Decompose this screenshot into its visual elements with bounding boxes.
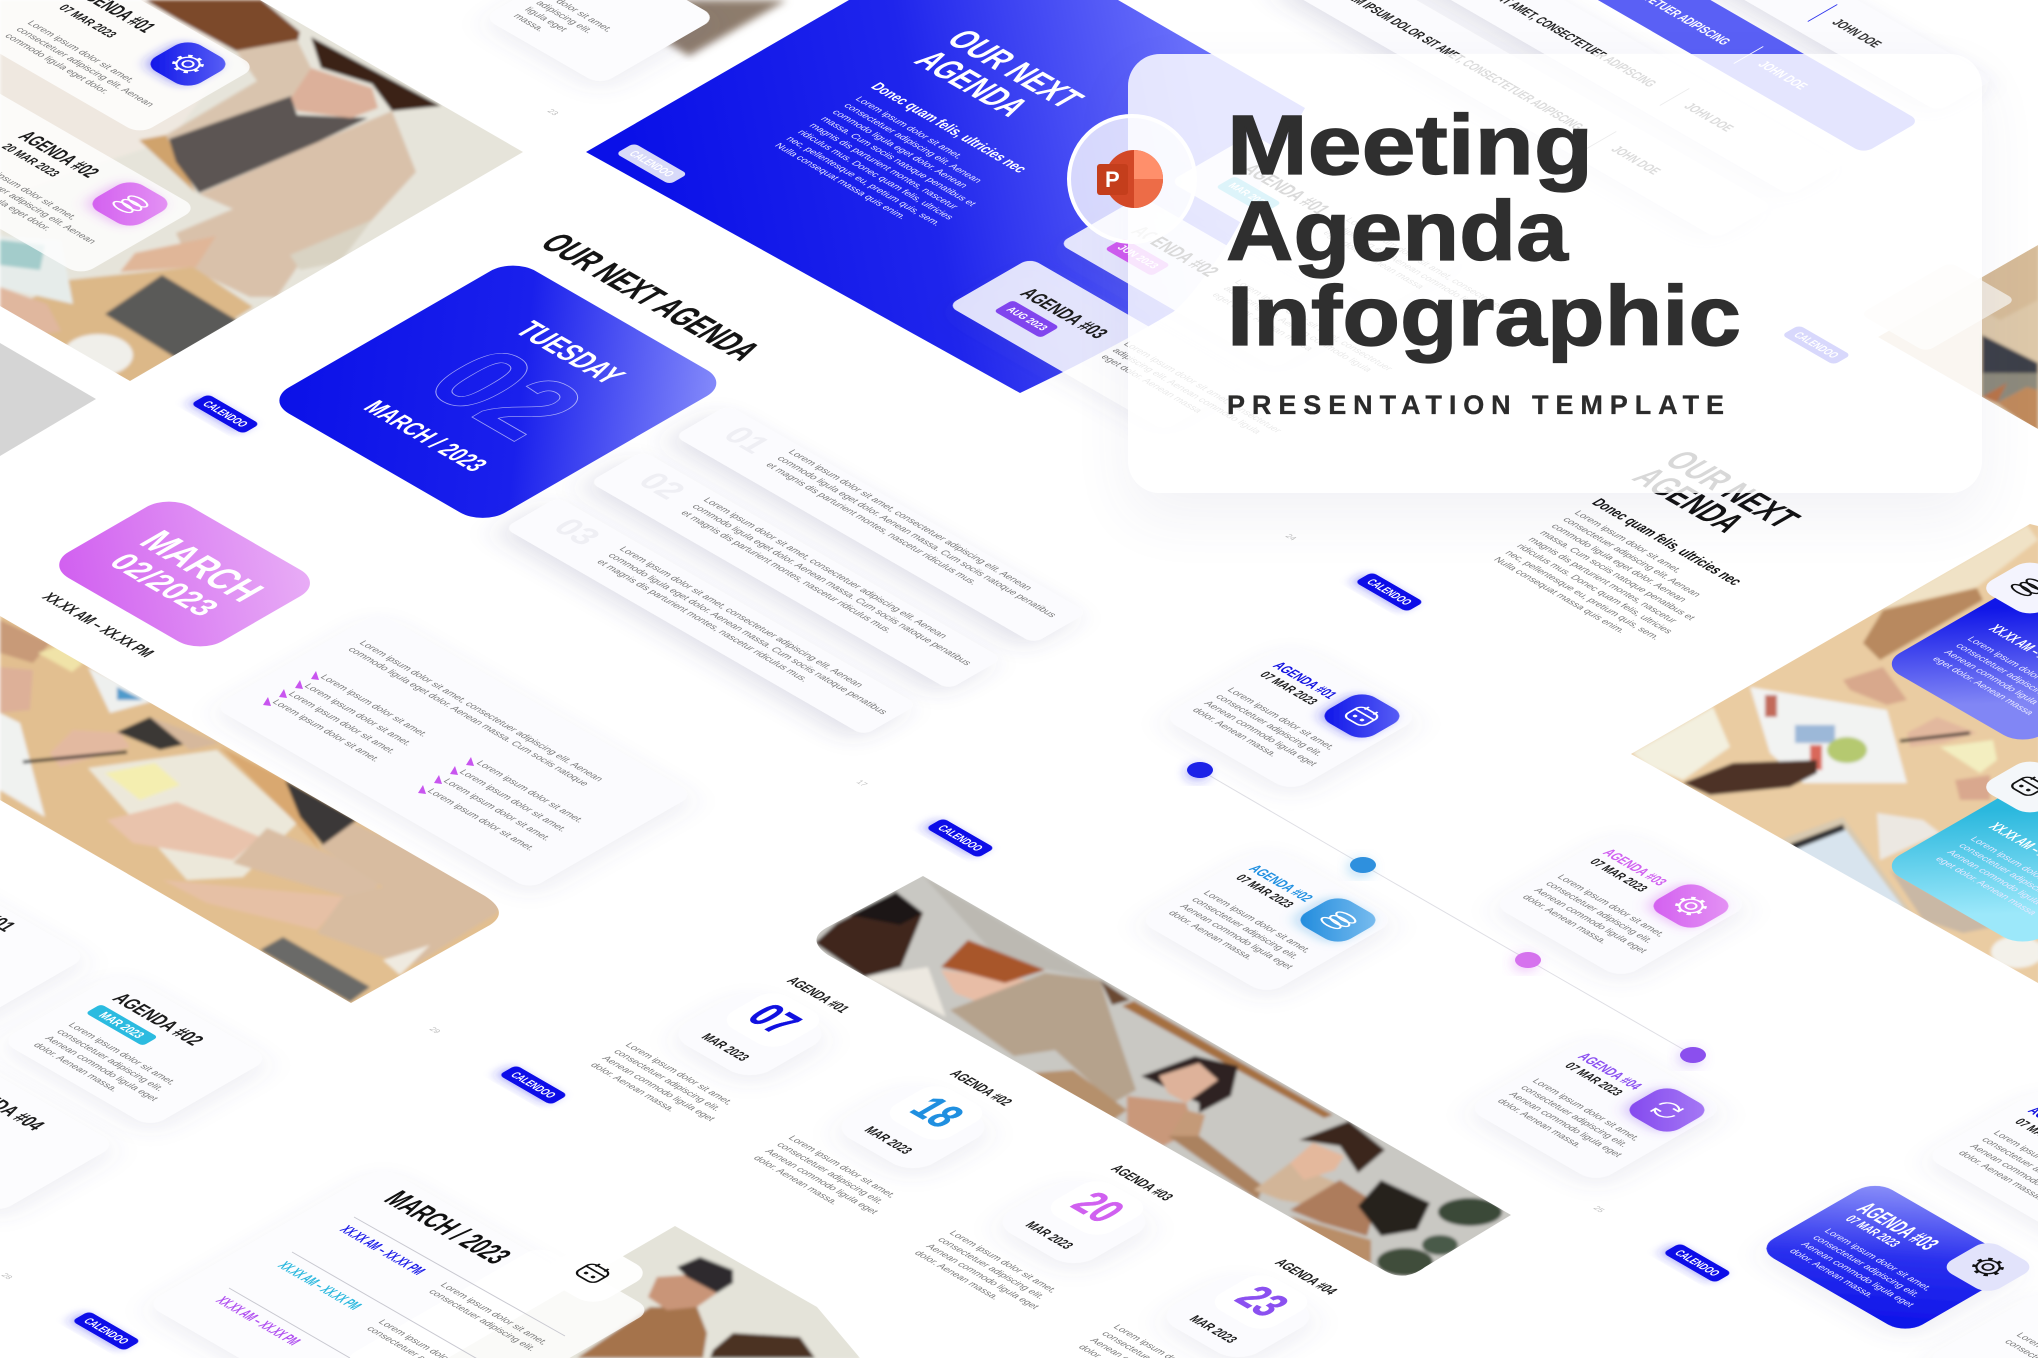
bullets left: Lorem ipsum dolor sit amet. <box>301 682 414 748</box>
agenda 01 text: commodo ligula eget dolor. <box>2 32 112 96</box>
outlined number 02: 02 <box>397 331 614 457</box>
badge: calendoo: CALENDOO <box>934 823 986 853</box>
agenda 01 text: consectetuer adipiscing elit. Aenean <box>13 26 156 109</box>
panel: march pink date <box>46 494 323 654</box>
card: agenda 02 on slide: eget dolor. Aenean massa <box>1209 291 1316 353</box>
schedule card content: Lorem ipsum dolor sit amet, <box>437 1281 550 1347</box>
card: teal time slot <box>1881 774 2038 948</box>
timeline dot purple <box>1680 1047 1706 1063</box>
icon: powerpoint badge <box>1069 116 1195 242</box>
icon: gear <box>143 38 233 90</box>
timeline card 3: consectetuer adipiscing elit. <box>1543 880 1655 945</box>
page number 25: 25 <box>1591 1205 1607 1214</box>
subtitle: PRESENTATION TEMPLATE <box>1227 390 1724 420</box>
date block 20: Lorem ipsum dolor sit amet, <box>946 1229 1059 1295</box>
card: agenda 04 partial <box>0 1058 117 1214</box>
badge: calendoo <box>1663 1243 1732 1283</box>
glass card: agenda 01 <box>0 0 257 134</box>
row 03: et magnis dis parturient montes, nascetur ridiculus mus. <box>594 558 811 684</box>
page number 29: 29 <box>427 1026 443 1035</box>
panel: blue agenda 03 card: Aenean commodo ligula eget <box>1798 1241 1916 1309</box>
timeline dot sky <box>1350 857 1376 873</box>
panel: tuesday date card <box>266 258 730 526</box>
agenda 02 text: AGENDA #02 <box>13 128 104 181</box>
faint badge under panel <box>1782 325 1851 365</box>
agenda list cards over blue slide <box>948 134 1528 465</box>
card: blue time slot <box>1881 572 2038 746</box>
card: agenda 03 on slide: AGENDA #03 <box>1015 285 1113 342</box>
card: top text fragment: adipiscing elit. <box>533 0 595 35</box>
slide body text: nec, pellentesque eu, pretium quis, sem. <box>783 135 943 228</box>
agenda 02 content: Aenean commodo ligula eget <box>42 1035 160 1103</box>
date block 23: AGENDA #04 <box>1271 1257 1341 1297</box>
bullets left: Lorem ipsum dolor sit amet. <box>269 698 382 764</box>
slide body text: Nulla consequat massa quis enim. <box>772 142 909 221</box>
card: agenda 01 on slide: Lorem ipsum dolor sit amet, consectetuer <box>1342 216 1507 311</box>
slide badge: CALENDOO <box>626 149 678 179</box>
date block 18: Lorem ipsum dolor sit amet, <box>785 1134 898 1200</box>
date block 23: MAR 2023 <box>1186 1313 1242 1345</box>
date block 20: dolor. Aenean massa. <box>911 1249 1002 1301</box>
card: agenda 02 on slide: Lorem ipsum dolor sit amet, consectetuer <box>1231 278 1396 373</box>
bullets right <box>418 757 586 853</box>
panel: blue agenda 03 card: 07 MAR 2023 <box>1842 1213 1905 1249</box>
badge: calendoo: CALENDOO <box>1671 1248 1723 1278</box>
timeline card 3: AGENDA #03 <box>1599 847 1671 888</box>
icon: coins white tile <box>1978 558 2038 618</box>
agenda 02 text <box>0 128 110 252</box>
bullets right: Lorem ipsum dolor sit amet. <box>456 768 569 834</box>
schedule card content: MARCH / 2023 <box>376 1186 519 1269</box>
lower right text block: our next agenda: consectetuer adipiscing elit. Aenean <box>1560 516 1703 599</box>
timeline card 1: dolor. Aenean massa. <box>1189 706 1280 758</box>
timeline card 4: AGENDA #04 <box>1574 1051 1646 1092</box>
badge: calendoo <box>499 1065 568 1105</box>
page number 23: 23 <box>545 108 561 117</box>
photo: woman at desk with glass cards <box>0 0 530 385</box>
date block 20: AGENDA #03 <box>1107 1163 1177 1203</box>
timeline card 1: Lorem ipsum dolor sit amet, <box>1224 686 1337 752</box>
date block 07: 07 <box>736 997 813 1041</box>
schedule card content: XX.XX AM – XX.XX PM <box>336 1224 428 1277</box>
lower right text block: our next agenda: AGENDA <box>1623 462 1754 538</box>
photo: slide fragment at top <box>600 0 787 56</box>
timeline card 3: 07 MAR 2023 <box>1587 856 1651 894</box>
badge: calendoo <box>72 1311 141 1351</box>
timeline card 1: consectetuer adipiscing elit. <box>1213 693 1325 758</box>
glass card on man photo <box>341 1245 653 1358</box>
date block 07: Aenean commodo ligula eget <box>599 1055 717 1123</box>
icon: calendar white tile <box>1978 757 2038 817</box>
card: agenda 01 on slide: eget dolor. Aenean massa <box>1320 229 1427 291</box>
card: agenda 02 on slide: AGENDA #02 <box>1126 223 1224 280</box>
schedule card content: consectetuer adipiscing elit. <box>426 1288 538 1353</box>
row 02: 02 <box>630 467 694 505</box>
page number 24: 24 <box>1283 533 1299 542</box>
photo: hands on table <box>0 610 520 1010</box>
card: agenda 03 on slide: eget dolor. Aenean massa <box>1098 353 1205 415</box>
lower right text block: our next agenda: magnis dis parturient montes, nascetur <box>1525 536 1680 625</box>
panel: march pink date: 02/2023 <box>101 548 227 622</box>
row: fourth <box>1284 0 1773 238</box>
badge: calendoo: CALENDOO <box>1363 577 1415 607</box>
date block 07: MAR 2023 <box>698 1031 754 1063</box>
card: agenda 01 on slide: adipiscing elit. Aenean commodo ligula <box>1331 223 1486 312</box>
lower right text block: our next agenda: massa. Cum sociis natoque penatibus et <box>1537 529 1698 622</box>
badge: calendoo: CALENDOO <box>199 399 251 429</box>
card: agenda 02 <box>0 972 270 1128</box>
agenda 02 content: Lorem ipsum dolor sit amet, <box>65 1021 178 1087</box>
date block 23 <box>1075 1257 1341 1358</box>
slide title <box>905 24 1092 122</box>
panel: big blue slide <box>586 0 1305 393</box>
date block 20 <box>911 1163 1177 1318</box>
agenda 02 text: 20 MAR 2023 <box>0 141 63 179</box>
date block 18: Aenean commodo ligula eget <box>762 1148 880 1216</box>
row 03: Lorem ipsum dolor sit amet, consectetuer adipiscing elit. Aenean <box>616 545 865 689</box>
row 02: Lorem ipsum dolor sit amet, consectetuer adipiscing elit. Aenean <box>700 496 949 640</box>
bullets left: Lorem ipsum dolor sit amet. <box>285 690 398 756</box>
page number 17: 17 <box>854 779 870 788</box>
panel: blue agenda 03 card: dolor. Aenean massa. <box>1786 1247 1877 1299</box>
timeline card 4: Aenean commodo ligula eget <box>1506 1091 1624 1159</box>
icon: coins <box>85 178 175 230</box>
badge: calendoo <box>191 394 260 434</box>
slide badge <box>616 143 688 184</box>
slide body text: massa. Cum sociis natoque penatibus et <box>818 115 979 208</box>
timeline card 2: dolor. Aenean massa. <box>1165 909 1256 961</box>
bullets right: Lorem ipsum dolor sit amet. <box>473 759 586 825</box>
panel: blue agenda 03 card: AGENDA #03 <box>1850 1199 1945 1254</box>
agenda 02 content: dolor. Aenean massa. <box>30 1041 121 1093</box>
bullets left: Lorem ipsum dolor sit amet. <box>317 673 430 739</box>
slide body text <box>772 95 1013 235</box>
row 03: 03 <box>545 513 609 551</box>
card: agenda 02 on slide: adipiscing elit. Aenean commodo ligula <box>1220 285 1375 374</box>
timeline card 1: 07 MAR 2023 <box>1257 669 1321 707</box>
row 02: et magnis dis parturient montes, nascetur ridiculus mus. <box>678 509 895 635</box>
slide body text: consectetuer adipiscing elit. Aenean <box>841 102 984 185</box>
date block 07: Lorem ipsum dolor sit amet, <box>622 1041 735 1107</box>
timeline card 1: Aenean commodo ligula eget <box>1201 700 1319 768</box>
bullets left <box>263 671 430 764</box>
title glass panel <box>1128 54 1982 493</box>
card: agenda 02 on slide <box>1059 196 1417 403</box>
lower right text block: our next agenda: ridiculus mus. Donec quam felis, ultricies <box>1514 542 1675 636</box>
numbered list <box>504 405 1087 736</box>
row: fourth: JOHN DOE <box>1608 143 1665 177</box>
row: third <box>1357 0 1846 196</box>
slide subtitle: Donec quam felis, ultricies nec <box>867 81 1030 175</box>
date block 07: AGENDA #01 <box>783 975 853 1015</box>
title text: Meeting <box>1227 98 1593 192</box>
panel: blue agenda 03 card: Lorem ipsum dolor sit amet, <box>1821 1227 1934 1293</box>
panel: march schedule card <box>146 1167 608 1358</box>
lower right text block: our next agenda: commodo ligula eget dolor. Aenean <box>1548 523 1689 604</box>
card: agenda 02 on slide: JUN 2023 <box>1114 243 1161 271</box>
title text: Agenda <box>1226 184 1569 278</box>
row 02 <box>589 451 1002 690</box>
date block 07 <box>587 975 853 1130</box>
date block 07: dolor. Aenean massa. <box>587 1061 678 1113</box>
card: top text fragment <box>483 0 717 85</box>
card: agenda 01 partial <box>0 870 88 1026</box>
glass card: agenda 02 <box>0 58 198 276</box>
badge: calendoo: CALENDOO <box>507 1070 559 1100</box>
tuesday label: TUESDAY <box>507 316 633 390</box>
row: third: JOHN DOE <box>1681 100 1738 134</box>
schedule card content: XX.XX AM – XX.XX PM <box>274 1260 365 1312</box>
lower right text block: our next agenda: OUR NEXT <box>1655 445 1808 534</box>
badge: calendoo <box>926 818 995 858</box>
title text: Infographic <box>1227 269 1741 363</box>
date block 20: consectetuer adipiscing elit. <box>935 1236 1047 1301</box>
icon: powerpoint badge: P <box>1105 167 1120 192</box>
card: top text fragment: massa. <box>510 12 547 33</box>
date block 18: AGENDA #02 <box>946 1068 1016 1108</box>
bullets right: Lorem ipsum dolor sit amet. <box>440 777 553 843</box>
glass card on right photo <box>1860 262 2016 352</box>
date block 18: dolor. Aenean massa. <box>750 1154 841 1206</box>
agenda 01 text: 07 MAR 2023 <box>56 2 120 40</box>
slide body text: magnis dis parturient montes, nascetur <box>806 122 961 211</box>
table rows top right <box>1284 0 1994 238</box>
agenda 02 content: AGENDA #02 <box>107 990 208 1049</box>
row 01: et magnis dis parturient montes, nascetur ridiculus mus. <box>763 461 980 587</box>
date block 18: 18 <box>899 1090 976 1134</box>
row 03: commodo ligula eget dolor. Aenean massa. Cum sociis natoque penatibus <box>605 552 890 716</box>
row: top: JOHN DOE <box>1829 16 1886 50</box>
bullets right: Lorem ipsum dolor sit amet. <box>424 787 537 853</box>
agenda 02 content: MAR 2023 <box>95 1010 148 1040</box>
date block 18 <box>750 1068 1016 1223</box>
time label: XX.XX AM – XX.XX PM <box>38 590 158 660</box>
timeline card 4: dolor. Aenean massa. <box>1494 1097 1585 1149</box>
row 01: commodo ligula eget dolor. Aenean massa. Cum sociis natoque penatibus <box>774 455 1059 619</box>
slide title: OUR NEXT <box>937 24 1092 114</box>
timeline card 1 <box>1161 642 1421 792</box>
agenda 01 text <box>2 0 168 115</box>
date block 20: MAR 2023 <box>1022 1219 1078 1251</box>
lower right text block: our next agenda: nec, pellentesque eu, pretium quis, sem. <box>1502 549 1662 642</box>
timeline card 2: Lorem ipsum dolor sit amet, <box>1200 889 1313 955</box>
card: agenda 03 on slide: AUG 2023 <box>1003 305 1050 333</box>
timeline card 3: Aenean commodo ligula eget <box>1531 887 1649 955</box>
photo: man with glasses <box>570 1226 860 1358</box>
timeline dot pink <box>1515 952 1541 968</box>
agenda 01 text: Lorem ipsum dolor sit amet, <box>24 19 137 85</box>
card: teal time slot: eget dolor. Aenean massa <box>1932 855 2038 917</box>
lower right text block: our next agenda: Lorem ipsum dolor sit amet, <box>1571 509 1684 575</box>
row 02: commodo ligula eget dolor. Aenean massa. Cum sociis natoque penatibus <box>689 503 974 667</box>
heading: our next agenda: OUR NEXT AGENDA <box>531 228 769 366</box>
badge: calendoo: CALENDOO <box>80 1316 132 1346</box>
card: blue time slot: eget dolor. Aenean massa <box>1929 655 2036 717</box>
lower right text block: our next agenda: Nulla consequat massa quis enim. <box>1491 556 1628 635</box>
timeline card 4 <box>1466 1033 1726 1183</box>
row: top <box>1505 0 1994 112</box>
slide: bottom-left agenda cards <box>0 870 270 1214</box>
panel: blue agenda 03 card: consectetuer adipiscing elit. <box>1810 1234 1922 1299</box>
timeline card 2: AGENDA #02 <box>1245 863 1317 904</box>
month label: MARCH / 2023 <box>357 396 494 476</box>
icon: calendar tile <box>534 1239 652 1307</box>
card: right edge agenda <box>1924 1087 2038 1242</box>
date block 18: consectetuer adipiscing elit. <box>774 1141 886 1206</box>
row 03 <box>504 497 917 736</box>
title text <box>1226 98 1741 363</box>
lower right text block: our next agenda: Donec quam felis, ultricies nec <box>1588 497 1745 588</box>
card: agenda 01 on slide <box>1170 134 1528 341</box>
row: highlighted blue: JOHN DOE <box>1755 58 1812 92</box>
schedule card content <box>212 1186 565 1358</box>
timeline card 2 <box>1137 845 1397 995</box>
photo: team meeting table <box>1625 520 2038 990</box>
timeline dot blue <box>1187 762 1213 778</box>
panel: bullet list card <box>213 612 694 890</box>
card: agenda 03 on slide <box>948 258 1306 465</box>
faint badge under panel: CALENDOO <box>1790 330 1842 360</box>
card: bottom right edge <box>1924 1290 2038 1358</box>
lower right text block: our next agenda <box>1491 445 1808 649</box>
photo: right edge behind panel <box>1878 245 2038 429</box>
photo: team hands together <box>800 870 1520 1290</box>
date block 20: Aenean commodo ligula eget <box>923 1243 1041 1311</box>
timeline card 4: Lorem ipsum dolor sit amet, <box>1529 1077 1642 1143</box>
panel: bullet list card: Lorem ipsum dolor sit amet, consectetuer adipiscing elit. Aenean <box>356 639 605 783</box>
card: agenda 01 on slide: MAR 2023 <box>1225 181 1272 209</box>
timeline card 4: 07 MAR 2023 <box>1562 1060 1626 1098</box>
row 01 <box>674 405 1087 644</box>
agenda 02 content: consectetuer adipiscing elit. <box>54 1028 166 1093</box>
timeline card 3: Lorem ipsum dolor sit amet, <box>1554 873 1667 939</box>
gray slide edge <box>0 343 96 456</box>
date block 20: 20 <box>1060 1185 1137 1229</box>
timeline card 2: 07 MAR 2023 <box>1233 872 1297 910</box>
panel: bullet list card: commodo ligula eget dolor. Aenean massa. Cum sociis natoque <box>345 646 591 788</box>
agenda 02 content <box>30 990 208 1110</box>
card: top text fragment: ligula eget <box>522 6 570 33</box>
card: blue time slot: Aenean commodo ligula <box>1941 649 2038 706</box>
date block 23: 23 <box>1224 1279 1301 1323</box>
date block 07: consectetuer adipiscing elit. <box>611 1048 723 1113</box>
timeline card 3 <box>1491 829 1751 979</box>
card: agenda 03 on slide: Lorem ipsum dolor sit amet, consectetuer <box>1120 340 1285 435</box>
slide title: AGENDA <box>905 45 1037 122</box>
badge: calendoo <box>1355 572 1424 612</box>
card: agenda 01 on slide: AGENDA #01 <box>1237 161 1335 218</box>
icon: gear tile <box>1940 1239 2036 1295</box>
timeline card 1: AGENDA #01 <box>1269 660 1341 701</box>
timeline connector <box>1200 770 1693 1055</box>
row: highlighted blue <box>1431 0 1920 154</box>
timeline card 4: consectetuer adipiscing elit. <box>1518 1084 1630 1149</box>
slide body text: Lorem ipsum dolor sit amet, <box>852 95 965 161</box>
row 01: Lorem ipsum dolor sit amet, consectetuer adipiscing elit. Aenean <box>785 448 1034 592</box>
slide body text: ridiculus mus. Donec quam felis, ultricies <box>795 128 956 222</box>
card: agenda 03 on slide: adipiscing elit. Aenean commodo ligula <box>1109 347 1264 436</box>
panel: blue agenda 03 card <box>1756 1180 2036 1334</box>
slide body text: commodo ligula eget dolor. Aenean <box>829 109 970 190</box>
date block 18: MAR 2023 <box>861 1124 917 1156</box>
timeline card 3: dolor. Aenean massa. <box>1519 893 1610 945</box>
timeline card 2: consectetuer adipiscing elit. <box>1189 896 1301 961</box>
timeline card 2: Aenean commodo ligula eget <box>1177 903 1295 971</box>
panel: march pink date: MARCH <box>130 524 274 608</box>
row 01: 01 <box>715 421 779 459</box>
